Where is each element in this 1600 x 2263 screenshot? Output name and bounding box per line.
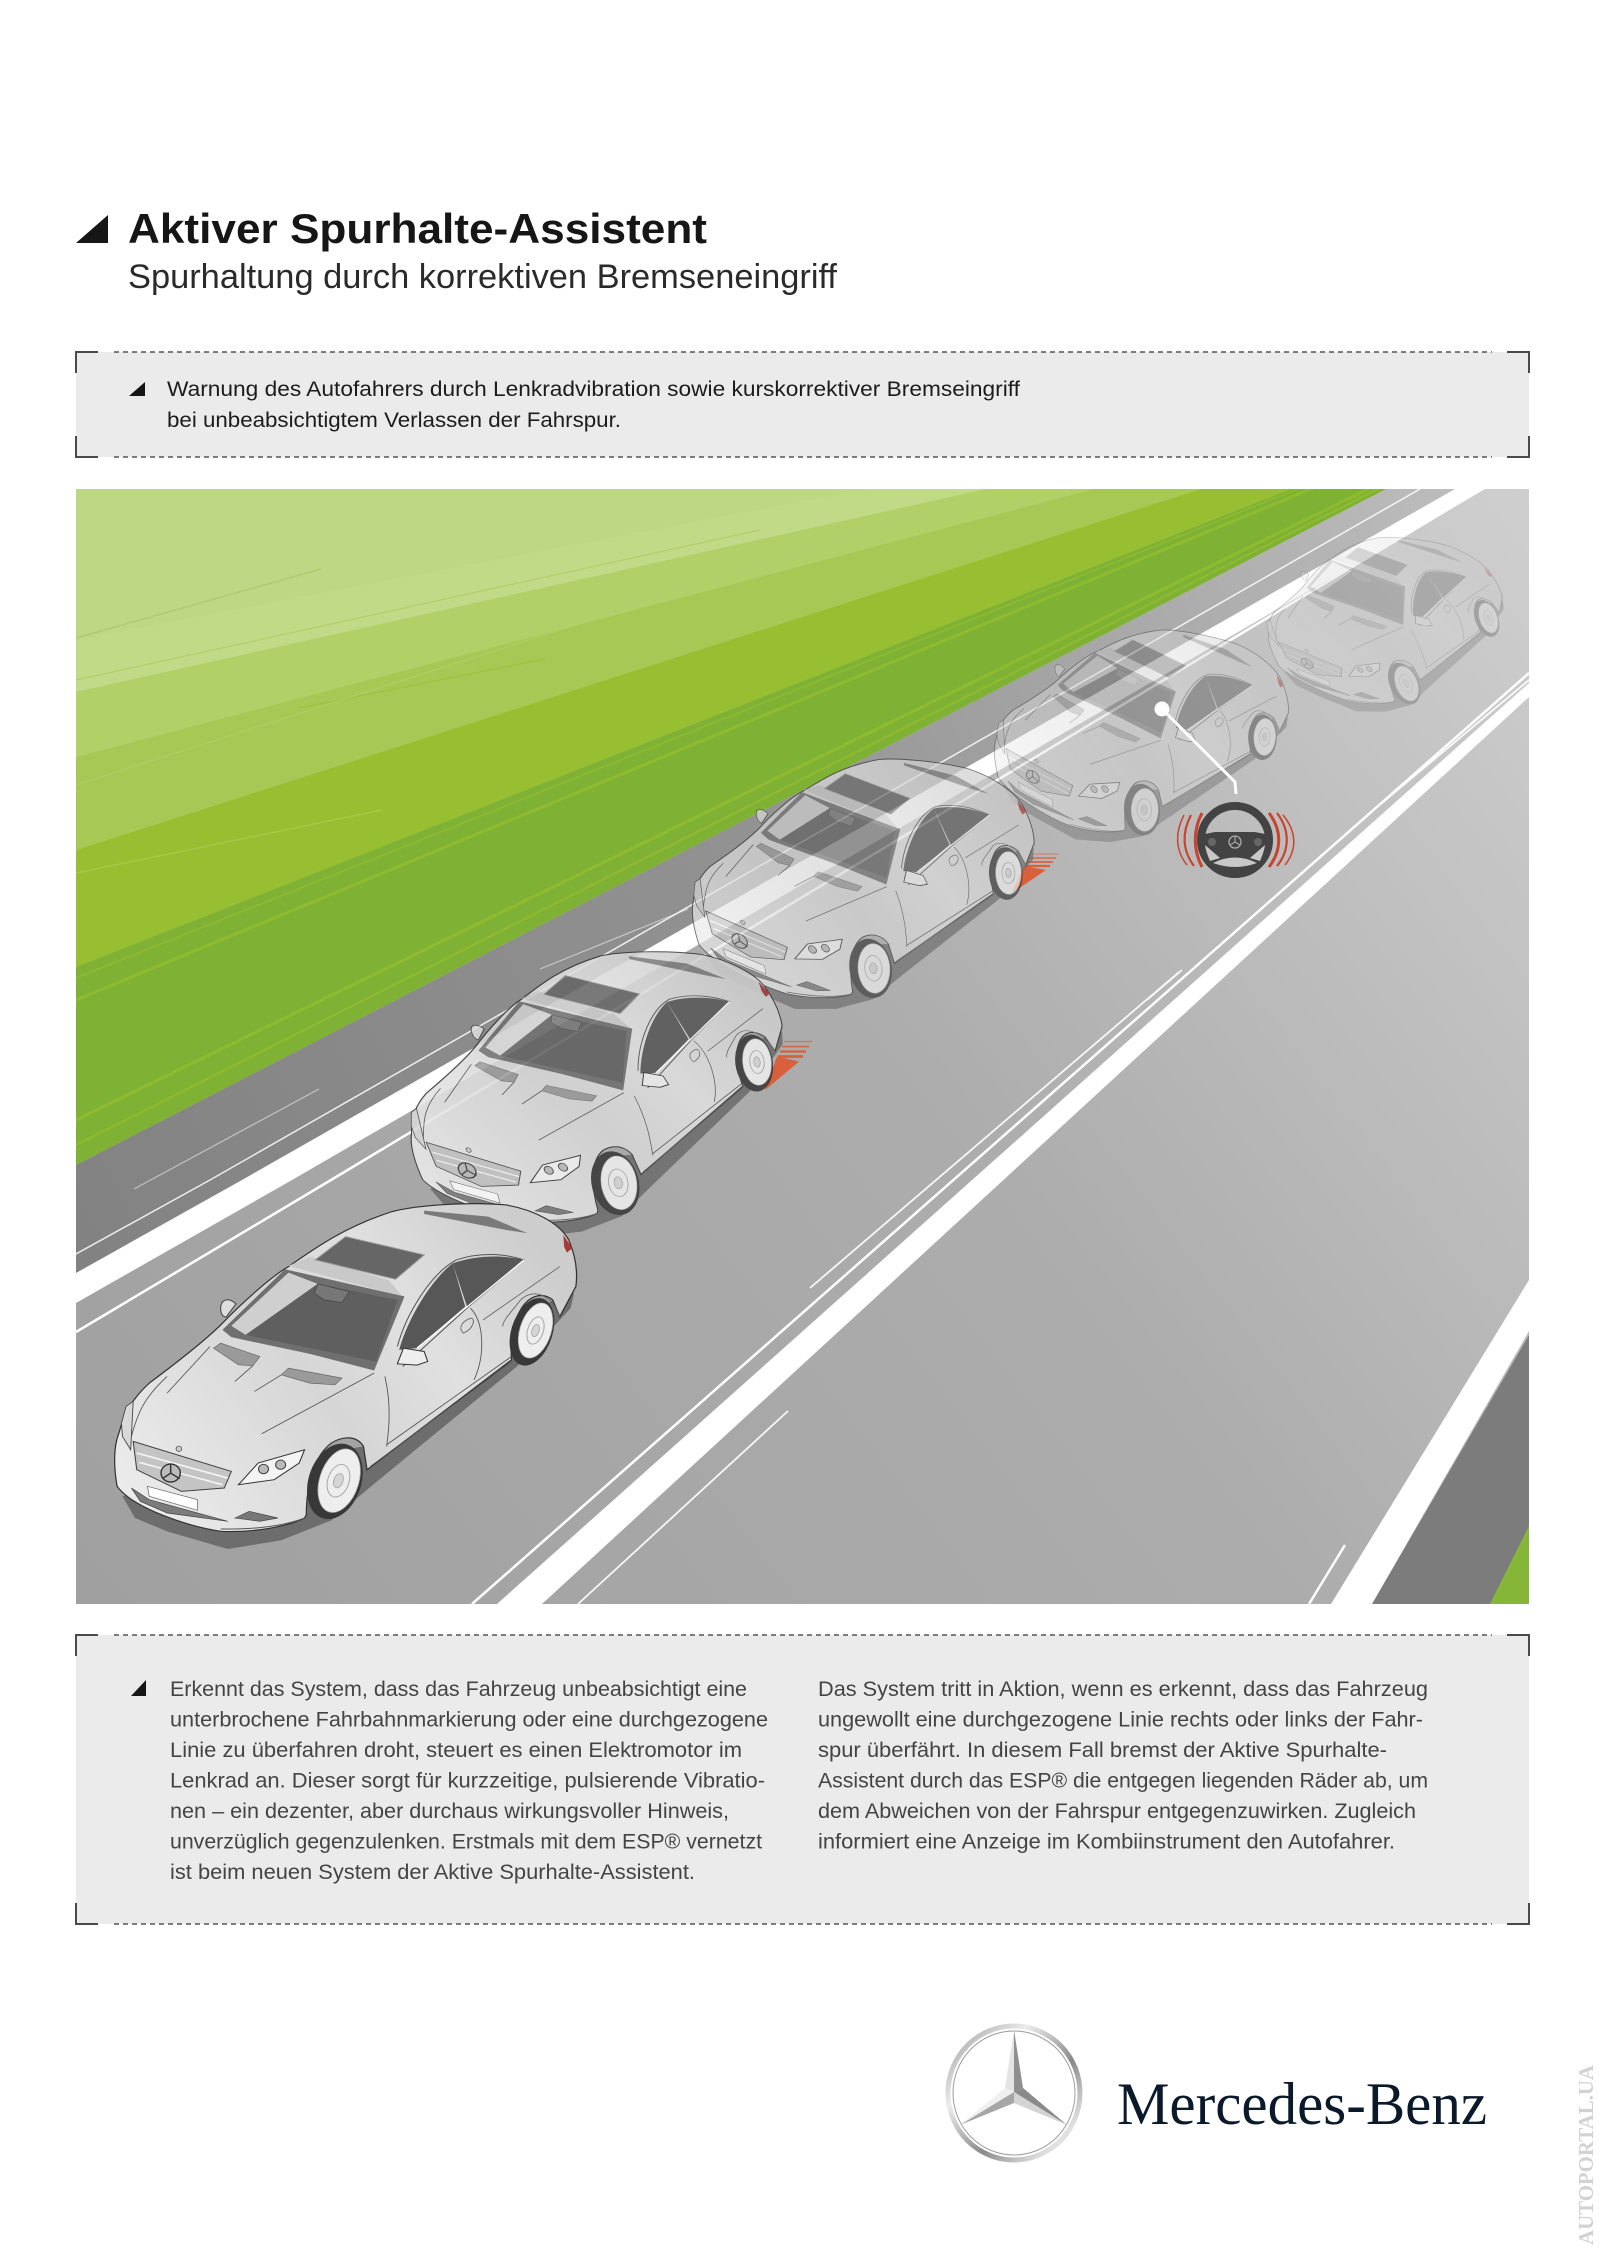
road surface	[76, 489, 1529, 1604]
logo: Mercedes-Benz wordmark: Mercedes-Benz	[1117, 2071, 1487, 2137]
text column 1: unterbrochene Fahrbahnmarkierung oder eine durchgezogene	[170, 1708, 768, 1732]
text column 2	[818, 1677, 1428, 1854]
panel: summary box	[76, 352, 1529, 457]
icon: title triangle	[76, 215, 108, 243]
icon: vibrating steering wheel	[1178, 806, 1294, 876]
car position 2	[410, 951, 783, 1234]
roadside shoulder	[76, 489, 1455, 1273]
text column 1: nen – ein dezenter, aber durchaus wirkungsvoller Hinweis,	[170, 1799, 729, 1823]
text column 2: Das System tritt in Aktion, wenn es erkennt, dass das Fahrzeug	[818, 1677, 1428, 1701]
summary text	[167, 377, 1020, 432]
connector: car to steering wheel	[1154, 702, 1236, 794]
grass verge with streaks	[76, 489, 1386, 1165]
car position 1	[115, 1204, 577, 1549]
far right grass corner	[1490, 1526, 1529, 1604]
lane markings	[76, 489, 1529, 1604]
title heading: Aktiver Spurhalte-Assistent	[128, 205, 707, 252]
car position 4	[994, 630, 1289, 842]
illustration: road scene	[76, 489, 1529, 1604]
text column 2: informiert eine Anzeige im Kombiinstrument den Autofahrer.	[818, 1830, 1395, 1854]
text column 2: ungewollt eine durchgezogene Linie rechts oder links der Fahr-	[818, 1708, 1423, 1732]
text column 1: Lenkrad an. Dieser sorgt für kurzzeitige, pulsierende Vibratio-	[170, 1768, 765, 1792]
summary text: bei unbeabsichtigtem Verlassen der Fahrspur.	[167, 408, 621, 432]
logo: Mercedes-Benz star	[948, 2026, 1080, 2160]
car position 3	[692, 758, 1035, 1009]
subtitle: Spurhaltung durch korrektiven Bremseneingriff	[128, 258, 838, 296]
far right shoulder	[1372, 1335, 1529, 1604]
title block	[76, 205, 838, 296]
brake marks behind car 3	[1012, 854, 1059, 893]
panel: explanation box	[76, 1635, 1529, 1924]
brake marks behind car 2	[765, 1042, 812, 1090]
text column 2: spur überfährt. In diesem Fall bremst der Aktive Spurhalte-	[818, 1738, 1387, 1762]
car position 5	[1266, 536, 1504, 712]
text column 1: Linie zu überfahren droht, steuert es einen Elektromotor im	[170, 1738, 742, 1762]
text column 2: dem Abweichen von der Fahrspur entgegenzuwirken. Zugleich	[818, 1799, 1416, 1823]
watermark: AUTOPORTAL.UA	[1574, 2064, 1598, 2245]
text column 1: unverzüglich gegenzulenken. Erstmals mit dem ESP® vernetzt	[170, 1830, 762, 1854]
text column 1	[170, 1677, 768, 1884]
text column 2: Assistent durch das ESP® die entgegen liegenden Räder ab, um	[818, 1768, 1428, 1792]
icon: summary triangle	[129, 382, 145, 396]
text column 1: ist beim neuen System der Aktive Spurhalte-Assistent.	[170, 1860, 695, 1884]
summary text: Warnung des Autofahrers durch Lenkradvibration sowie kurskorrektiver Bremseingriff	[167, 377, 1020, 401]
icon: explanation triangle	[131, 1680, 146, 1696]
text column 1: Erkennt das System, dass das Fahrzeug unbeabsichtigt eine	[170, 1677, 747, 1701]
